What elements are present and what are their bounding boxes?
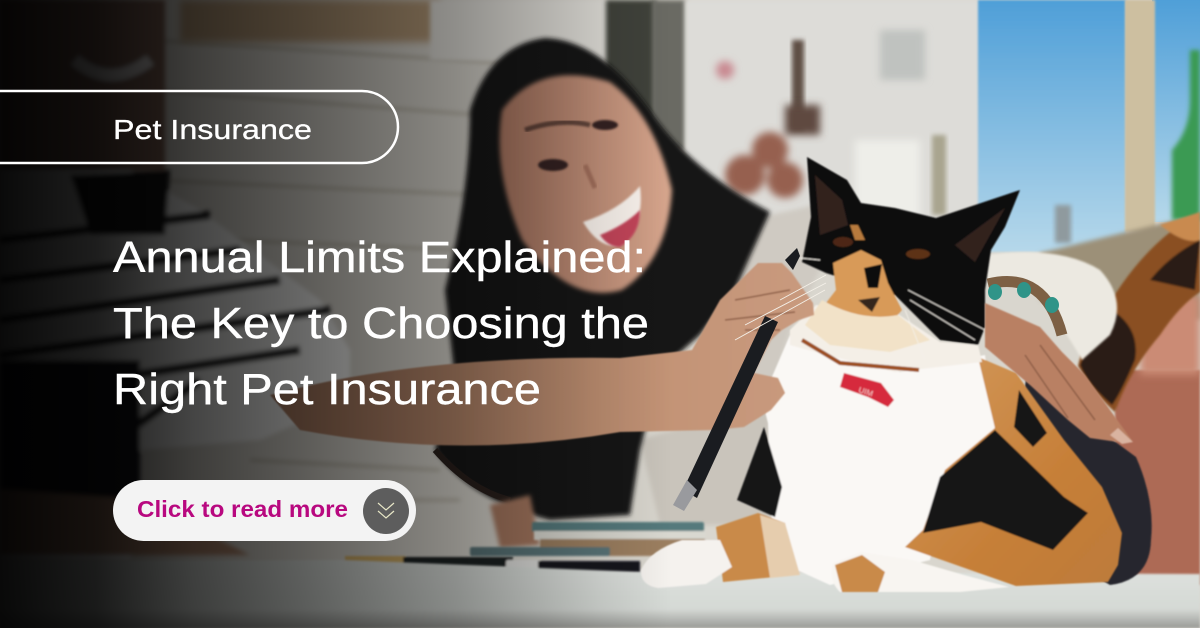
cat body white <box>762 335 995 585</box>
ear insides <box>815 175 848 235</box>
window frame <box>1125 0 1155 232</box>
woman <box>435 38 825 548</box>
title: Annual Limits Explained: <box>113 233 646 282</box>
neck and chin <box>790 305 982 372</box>
category pill: Pet Insurance <box>113 114 312 145</box>
black body patches <box>923 430 1088 550</box>
title <box>113 233 649 414</box>
bracelet <box>988 282 1062 335</box>
dark window post <box>606 0 656 130</box>
pink flowers <box>716 61 820 198</box>
shelf <box>180 0 440 42</box>
face <box>500 75 672 293</box>
green bottle <box>1172 50 1200 220</box>
call to action button: Click to read more <box>137 496 348 522</box>
tail <box>1078 212 1200 412</box>
title: The Key to Choosing the <box>113 299 649 348</box>
sweater sleeve <box>985 252 1117 360</box>
icon: double chevron <box>363 488 409 534</box>
sky <box>978 0 1126 252</box>
nose <box>864 264 882 288</box>
category pill <box>0 91 398 163</box>
salmon wall <box>1115 370 1200 585</box>
background building <box>685 0 980 270</box>
icon: calico cat: UIM <box>857 385 874 399</box>
collar <box>802 340 919 370</box>
front paw <box>641 540 732 588</box>
hand on cat <box>985 303 1133 444</box>
title: Right Pet Insurance <box>113 365 541 414</box>
table top <box>0 560 1200 628</box>
book and pencils <box>345 522 706 573</box>
muzzle <box>826 250 902 318</box>
pencil <box>673 248 800 511</box>
icon: calico cat <box>641 157 1122 592</box>
wall planks <box>150 40 610 500</box>
arm and hand <box>270 263 814 446</box>
head <box>802 157 1020 345</box>
eyes <box>833 237 853 247</box>
rear paw <box>832 552 1009 592</box>
tag <box>840 373 894 407</box>
rear body <box>1000 380 1152 585</box>
foreleg <box>716 513 795 582</box>
shirt <box>640 400 770 525</box>
hair <box>435 38 770 520</box>
lower hand <box>490 495 540 548</box>
smile <box>583 186 641 246</box>
left person <box>0 0 350 560</box>
call to action button <box>113 480 416 541</box>
whiskers over hand <box>735 275 826 340</box>
whiskers <box>800 258 985 360</box>
